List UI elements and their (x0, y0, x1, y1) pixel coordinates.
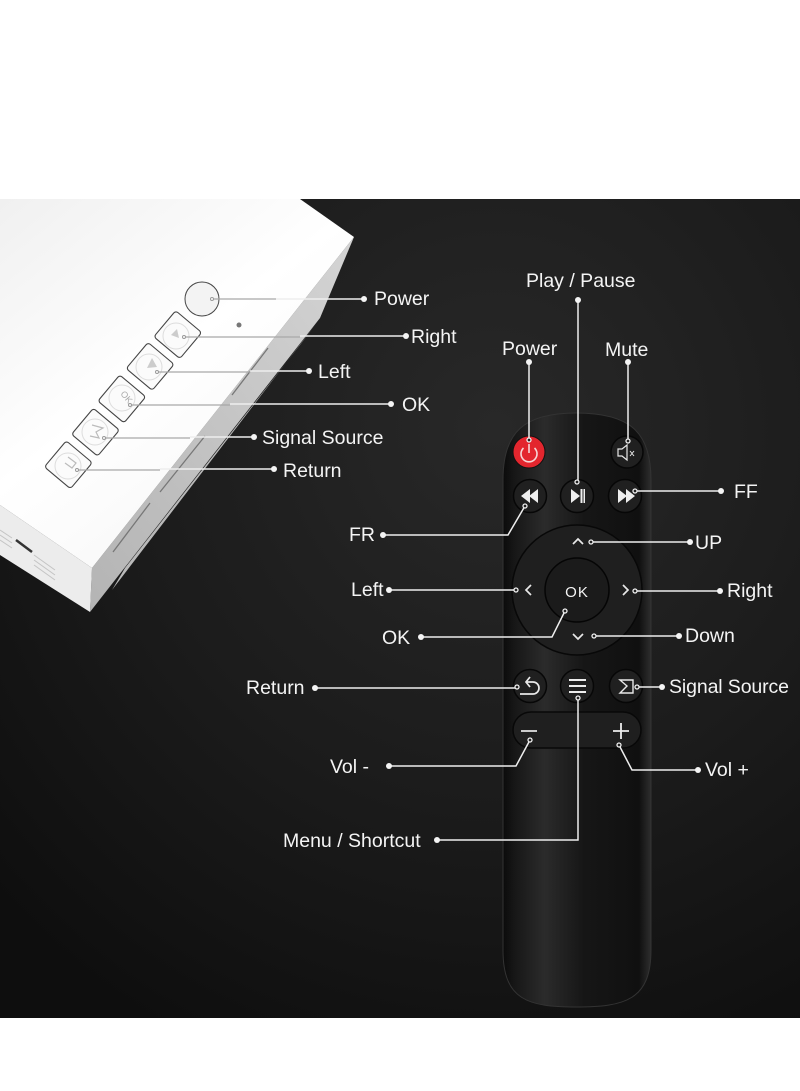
projector body (0, 199, 354, 612)
d-pad arrows (526, 539, 628, 639)
callout: Right: Right (727, 580, 773, 602)
button: fast rewind (514, 480, 546, 512)
callout: OK (382, 609, 567, 649)
callout: Play / Pause (526, 270, 635, 484)
projector callout: Right (182, 326, 457, 348)
callout: Left: Left (351, 579, 384, 601)
callout: UP (589, 532, 722, 554)
ok button: OK (565, 584, 589, 601)
d-pad ring (512, 525, 642, 655)
projector callout: Signal Source (102, 427, 383, 449)
button: menu (560, 670, 594, 702)
callout: Power (502, 338, 558, 442)
button: mute (611, 436, 643, 468)
callout: FF: FF (734, 481, 758, 503)
projector button: signal source (72, 408, 119, 456)
ok button (545, 558, 609, 622)
projector button: ok (98, 375, 146, 423)
callout: FR (349, 504, 527, 546)
callout: Menu / Shortcut: Menu / Shortcut (283, 830, 421, 852)
callout: Mute (605, 339, 648, 443)
projector callout: Right: Right (411, 326, 457, 348)
callout: Power: Power (502, 338, 558, 360)
projector callout: Return (76, 460, 342, 482)
remote control (503, 413, 651, 1007)
projector callout: Power: Power (374, 288, 430, 310)
callout: Vol -: Vol - (330, 756, 369, 778)
callout: Vol +: Vol + (705, 759, 749, 781)
button: fast forward (608, 480, 642, 512)
callout: FF (633, 481, 758, 503)
callout: Mute: Mute (605, 339, 648, 361)
projector callout: Power (210, 288, 430, 310)
projector callout: OK: OK (402, 394, 430, 416)
projector callout: Left (156, 361, 351, 383)
callout: FR: FR (349, 524, 375, 546)
callout: Return (246, 677, 519, 699)
callout: Signal Source: Signal Source (669, 676, 789, 698)
projector button: return (44, 441, 92, 489)
callout: UP: UP (695, 532, 722, 554)
button: signal source (610, 670, 642, 702)
projector button: right (154, 311, 202, 359)
projector callout: Return: Return (283, 460, 342, 482)
button: play pause (560, 480, 594, 512)
callout: Left (351, 579, 518, 601)
projector top face (0, 199, 354, 568)
callout: Right (633, 580, 773, 602)
callout: Menu / Shortcut (283, 696, 580, 852)
callout: Vol - (330, 738, 532, 778)
button: return (514, 670, 546, 702)
callout: Play / Pause: Play / Pause (526, 270, 635, 292)
indicator light (236, 322, 242, 328)
projector front face (0, 505, 92, 612)
callout: Down (592, 625, 735, 647)
callout: Down: Down (685, 625, 735, 647)
callout: Return: Return (246, 677, 305, 699)
button: power (513, 436, 545, 468)
projector callout: OK (128, 394, 430, 416)
projector callout: Left: Left (318, 361, 351, 383)
projector button: ok: OK (118, 389, 134, 405)
projector callout: Signal Source: Signal Source (262, 427, 383, 449)
remote body (503, 413, 651, 1007)
dark background panel (0, 199, 800, 1018)
projector button: left (126, 342, 174, 390)
projector power button (185, 282, 219, 316)
projector side face (90, 237, 354, 612)
callout: Vol + (617, 743, 749, 781)
callout: OK: OK (382, 627, 410, 649)
volume rocker (513, 712, 641, 748)
